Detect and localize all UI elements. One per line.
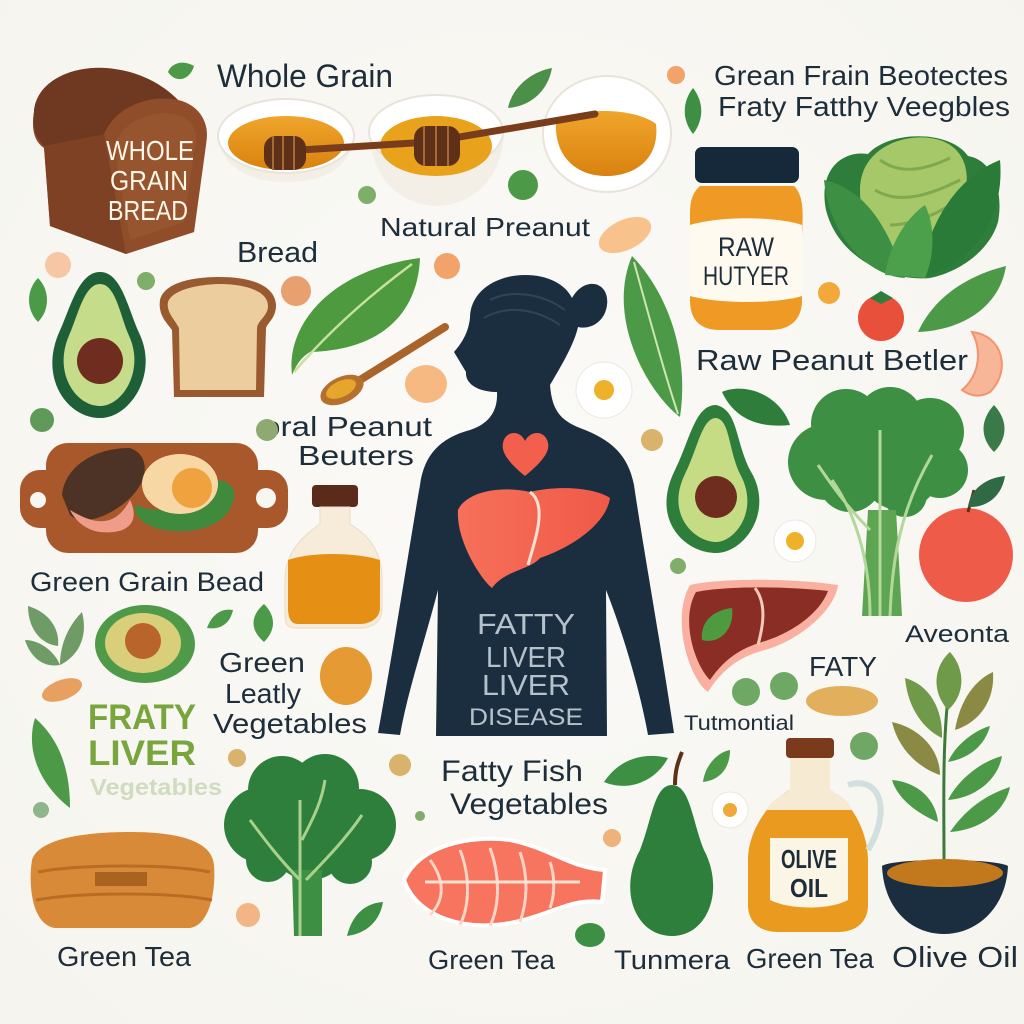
icon: loaf bottom left (31, 832, 214, 928)
label: fatty liver disease: LIVER (486, 642, 566, 674)
label: top right heading: Fraty Fatthy Veegbles (718, 91, 1010, 122)
icon: green peas (732, 672, 798, 706)
icon: small dark leaf right (984, 405, 1004, 452)
icon: broccoli greens (788, 387, 968, 616)
icon: tall leaf left (32, 718, 70, 808)
icon: citrus slice (962, 332, 1002, 396)
label: jar text (703, 232, 789, 291)
label: fatty liver disease (469, 609, 583, 731)
icon: avocado half left (52, 272, 146, 418)
label: natural preanut: Natural Preanut (380, 212, 591, 242)
label: oral peanut beuters (262, 411, 432, 471)
icon: red apple (919, 476, 1013, 602)
label: fatty fish vegetables: Vegetables (450, 788, 608, 821)
icon: plant sprig in bowl (882, 652, 1010, 934)
label: oral peanut beuters: Beuters (298, 440, 414, 471)
label: fatty liver disease: DISEASE (469, 704, 583, 731)
icon: small leaf by greens (347, 902, 383, 936)
label: fraty liver: LIVER (88, 734, 196, 773)
icon: toast slice (160, 277, 276, 397)
label: bread loaf text: BREAD (108, 195, 188, 226)
label: oral peanut beuters: oral Peanut (262, 411, 432, 442)
icon: liver in body (458, 488, 610, 588)
icon: wooden board with food (20, 443, 288, 553)
icon: whole grain bread loaf (33, 68, 207, 254)
label: fatty liver disease: LIVER (482, 670, 570, 702)
label: jar text: HUTYER (703, 261, 789, 291)
label: green tea centre: Green Tea (428, 945, 556, 975)
label: top right heading: Grean Frain Beotectes (714, 60, 1008, 91)
label: olive oil on bottle (781, 844, 837, 903)
icon: salmon fillet (404, 839, 605, 926)
icon: leafy green bottom (224, 754, 396, 936)
label: bread: Bread (237, 237, 318, 269)
label: green leatly vegetables (213, 647, 367, 739)
icon: cabbage (824, 136, 1001, 278)
label: green leatly vegetables: Vegetables (213, 708, 367, 739)
icon: herb sprig (25, 606, 84, 665)
label: green tea right: Green Tea (746, 943, 874, 974)
icon: olive oil bottle (748, 738, 881, 932)
label: bread loaf text: WHOLE (106, 135, 194, 166)
label: avenla: Aveonta (905, 621, 1010, 648)
icon: leaf right of tomato (918, 266, 1006, 332)
label: olive oil on bottle: OIL (790, 873, 828, 903)
icon: small leaf (703, 750, 730, 782)
icon: daisy (576, 362, 632, 418)
icon: raw peanut butter jar (690, 147, 803, 330)
label: fraty liver (88, 698, 196, 773)
label: bread loaf text: GRAIN (110, 165, 188, 196)
label: jar text: RAW (718, 232, 774, 262)
icon: golden nut (320, 647, 372, 705)
label: green grain bead: Green Grain Bead (30, 567, 264, 597)
heading: whole grain: Whole Grain (217, 58, 393, 94)
icon: daisy small (774, 520, 816, 562)
icon: leaf near pear (604, 756, 668, 786)
label: olive oil: Olive Oil (892, 942, 1018, 974)
icon: orange crumbs left (39, 673, 85, 707)
decorative scatter: small leaves and dots (29, 63, 878, 947)
icon: small orange flower (818, 282, 840, 304)
icon: woman silhouette (378, 275, 674, 736)
icon: daisy lower (712, 792, 748, 828)
icon: tomato (858, 291, 904, 341)
icon: orange blob near spoon (405, 365, 447, 403)
icon: avocado half centre right (666, 389, 790, 553)
label: green tea left: Green Tea (57, 941, 191, 972)
icon: small leaves (207, 604, 273, 642)
icon: heart (503, 433, 548, 476)
label: turmera: Tunmera (614, 945, 731, 975)
icon: golden pastry crumb (806, 686, 878, 716)
label: fraty liver: FRATY (88, 698, 196, 737)
icon: whole avocado pear (630, 752, 713, 936)
icon: avocado slice round (95, 605, 195, 683)
label: green leatly vegetables: Green (219, 647, 305, 678)
label: raw peanut better: Raw Peanut Betler (696, 345, 968, 377)
label: tutmontial: Tutmontial (684, 712, 794, 735)
label: top right heading (714, 60, 1010, 122)
icon: whole liver right (682, 580, 838, 692)
label: fatty fish vegetables (441, 755, 608, 821)
icon: oil bottle (285, 485, 382, 628)
label: green leatly vegetables: Leatly (225, 678, 301, 709)
icon: spinach leaf (291, 258, 420, 375)
label: bread loaf text (106, 135, 194, 226)
label: faty: FATY (809, 651, 877, 682)
icon: three honey bowls with dipper (218, 76, 671, 206)
label: vegetables faded: Vegetables (90, 774, 222, 800)
label: fatty fish vegetables: Fatty Fish (441, 755, 583, 788)
label: fatty liver disease: FATTY (477, 609, 575, 641)
icon: long green leaf (624, 256, 682, 417)
icon: wooden spoon with seeds (316, 327, 445, 412)
label: olive oil on bottle: OLIVE (781, 844, 837, 874)
